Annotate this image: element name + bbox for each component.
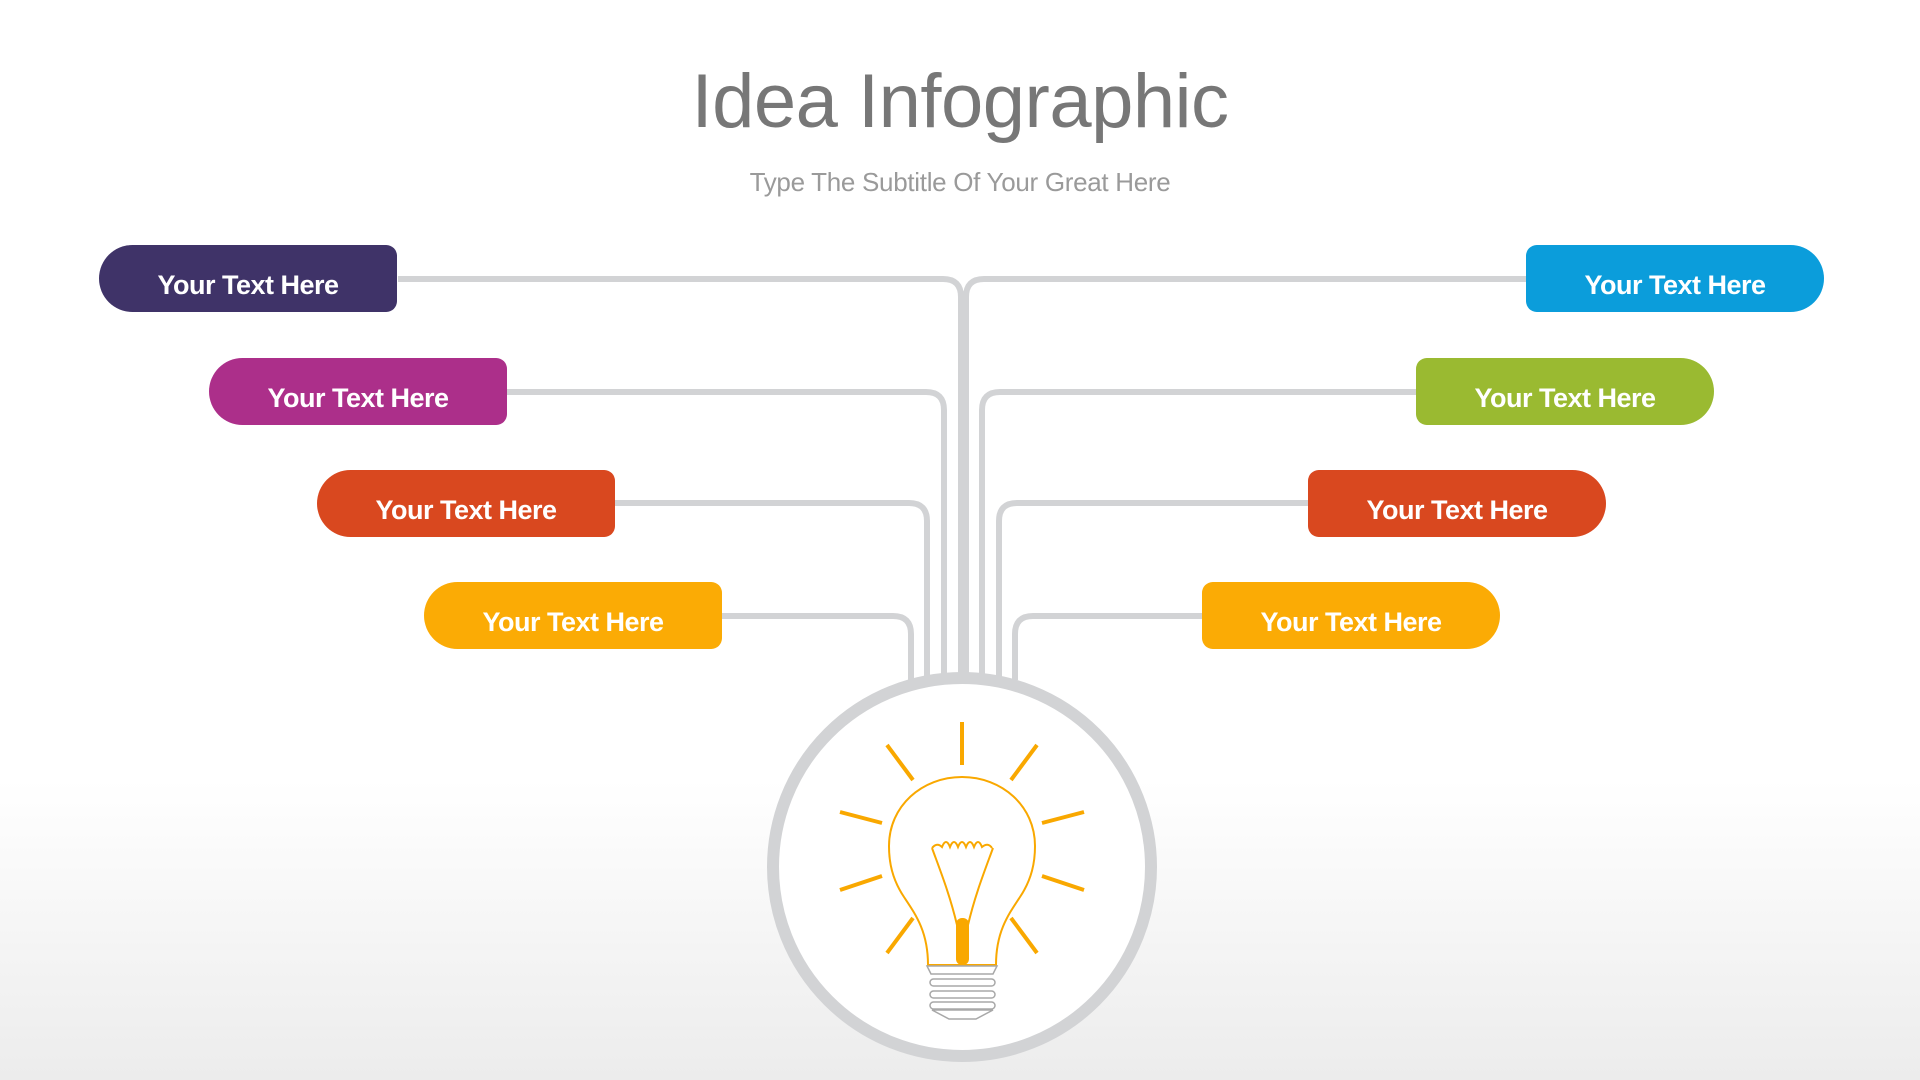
pill: right 4 <box>1202 582 1500 649</box>
pill: left 2 <box>209 358 507 425</box>
pill: left 1: Your Text Here <box>157 270 339 300</box>
pill: right 3: Your Text Here <box>1366 495 1548 525</box>
pill: left 4 <box>424 582 722 649</box>
subtitle: Type The Subtitle Of Your Great Here <box>750 167 1170 197</box>
pill: left 4: Your Text Here <box>482 607 664 637</box>
pill: left 2: Your Text Here <box>267 383 449 413</box>
pill: left 3 <box>317 470 615 537</box>
pill: right 2: Your Text Here <box>1474 383 1656 413</box>
pill: right 4: Your Text Here <box>1260 607 1442 637</box>
pill: right 3 <box>1308 470 1606 537</box>
pill: right 2 <box>1416 358 1714 425</box>
pill: right 1 <box>1526 245 1824 312</box>
pill: right 1: Your Text Here <box>1584 270 1766 300</box>
pill: left 1 <box>99 245 397 312</box>
title: Idea Infographic <box>691 59 1229 144</box>
pill: left 3: Your Text Here <box>375 495 557 525</box>
